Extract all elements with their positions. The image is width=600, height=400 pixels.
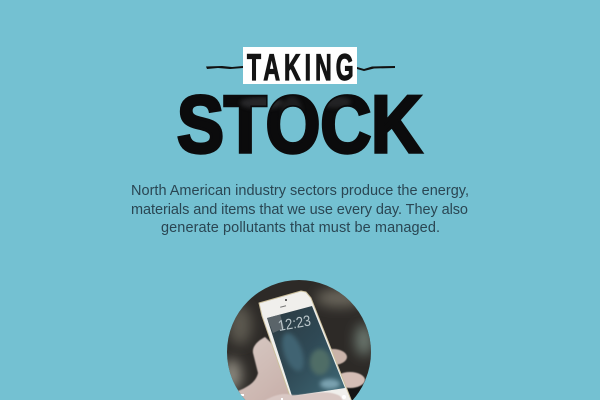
word: Taking: TAKING <box>247 46 354 88</box>
screen texture <box>267 314 340 389</box>
phone <box>259 291 352 400</box>
finger one <box>332 348 348 366</box>
intro text: generate pollutants that must be managed. <box>161 220 440 236</box>
finger two <box>335 372 365 388</box>
word: Stock: STOCK <box>177 80 422 170</box>
intro text: North American industry sectors produce the energy, <box>131 183 469 199</box>
lock screen clock: 12:23 <box>277 312 312 335</box>
speaker <box>285 299 287 301</box>
thumb over phone <box>262 392 344 400</box>
hand behind phone <box>226 337 365 400</box>
stock texture <box>240 96 351 110</box>
intro text <box>131 183 469 236</box>
rule right of Taking <box>357 66 395 71</box>
photo background <box>222 278 375 400</box>
photo: hand holding smartphone in a circle <box>222 278 375 400</box>
label box <box>243 47 357 84</box>
intro text: materials and items that we use every day. They also <box>131 202 468 218</box>
phone screen <box>267 306 345 396</box>
rule left of Taking <box>206 66 243 69</box>
clipped white letters at the bottom edge <box>236 394 346 400</box>
phone body <box>259 291 352 400</box>
palm <box>238 336 289 400</box>
title: Taking Stock <box>177 47 424 155</box>
